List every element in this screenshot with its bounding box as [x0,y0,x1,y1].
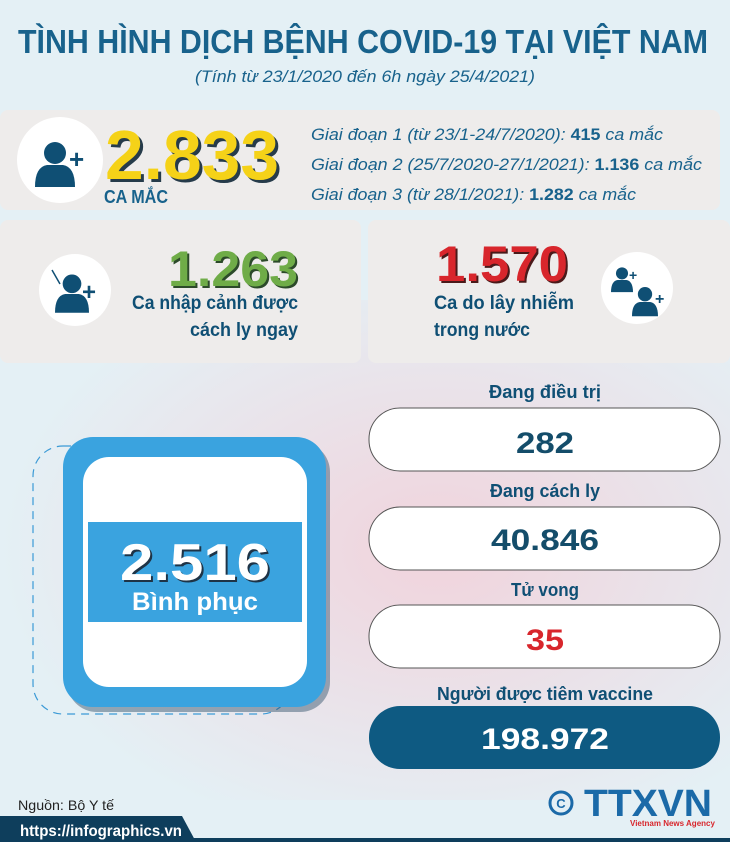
stat: vaccinated: Người được tiêm vaccine [437,684,653,704]
stat: treating: 282 [516,427,574,460]
label domestic: Ca do lây nhiễm [434,292,574,314]
label domestic: trong nước [434,320,530,341]
stat: vaccinated [369,684,720,769]
stages list: Giai đoạn 3 (từ 28/1/2021): 1.282 ca mắc [311,185,637,204]
stat: quarantine: 40.846 [491,524,599,557]
number 2.833: 2.833 [108,119,282,197]
number 1.263: 1.263 [168,241,298,297]
source: Nguồn: Bộ Y tế [18,797,114,813]
stat: deaths [369,580,720,668]
label imported: cách ly ngay [190,320,298,341]
number 1.570: 1.570 [438,238,570,294]
footer url bar: https://infographics.vn [20,823,182,840]
stages list: Giai đoạn 2 (25/7/2020-27/1/2021): 1.136 ca mắc [311,155,703,174]
number 1.570: 1.570 [436,236,568,292]
stat: vaccinated: 198.972 [481,723,609,756]
panel: domestic cases [368,220,730,363]
label Bình phục: Bình phục [132,588,258,616]
stat: treating [369,382,720,471]
stages list [311,125,703,204]
stat: quarantine: Đang cách ly [490,481,600,501]
footer url bar [0,816,730,842]
stat: deaths: Tử vong [511,580,579,600]
panel: imported cases [0,220,361,363]
panel: total cases [0,110,720,210]
subtitle: (Tính từ 23/1/2020 đến 6h ngày 25/4/2021) [195,67,535,86]
label domestic [434,292,574,341]
label imported [132,293,298,341]
number 2.833: 2.833 [105,116,279,194]
icon: arriving person [39,254,111,326]
label imported: Ca nhập cảnh được [132,293,298,314]
number 1.263: 1.263 [170,243,300,299]
stages list: Giai đoạn 1 (từ 23/1-24/7/2020): 415 ca mắc [311,125,664,144]
icon: two persons: + [629,267,637,283]
icon: arriving person: + [82,279,96,306]
label CA MẮC: CA MẮC [104,186,168,207]
number 2.516: 2.516 [122,536,272,594]
number 2.516: 2.516 [120,534,270,592]
stat: quarantine [369,481,720,570]
icon: two persons: + [655,291,664,308]
icon: person plus [17,117,103,203]
logo TTXVN: TTXVN [584,783,712,825]
stat: treating: Đang điều trị [489,382,601,402]
icon: two persons [601,252,673,324]
icon: person plus: + [69,144,84,174]
logo TTXVN: Vietnam News Agency [630,819,715,828]
panel: recovered [33,437,330,714]
logo TTXVN: C [556,796,566,811]
stat: deaths: 35 [526,624,564,657]
